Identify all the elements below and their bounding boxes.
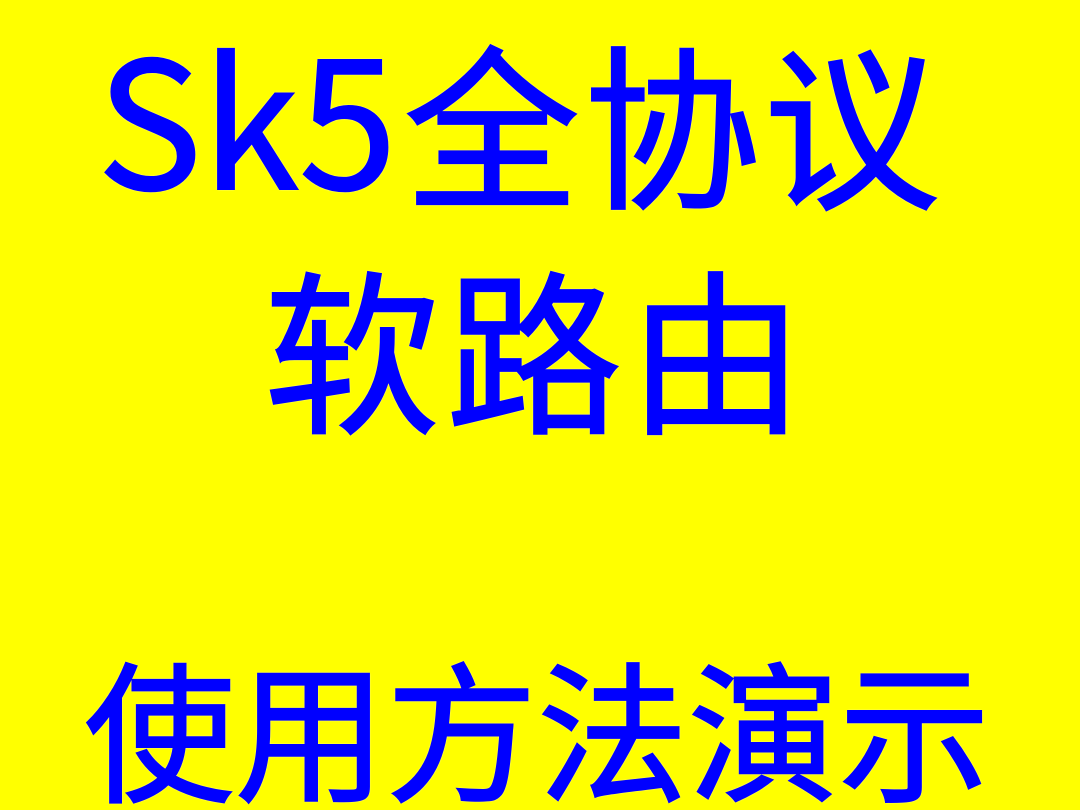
title line 2: 软路由: 软路由: [264, 216, 810, 471]
